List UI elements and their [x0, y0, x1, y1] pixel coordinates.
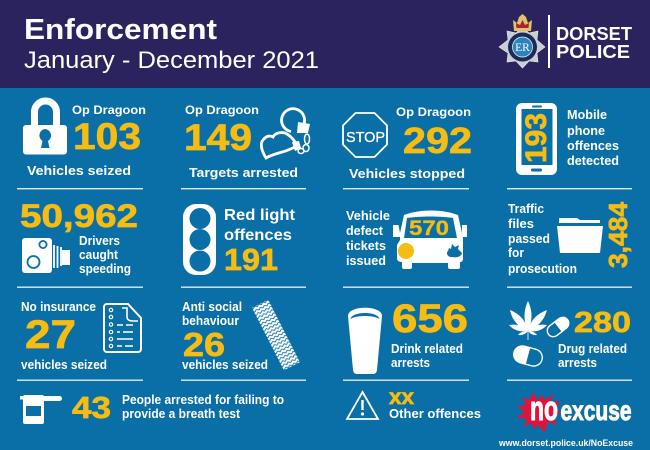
logo wordmark: DORSET — [556, 24, 632, 44]
panel: anti social behaviour: vehicles seized — [182, 358, 268, 372]
panel: vehicles seized, Op Dragoon: 103 — [73, 116, 141, 157]
label: offences — [567, 139, 619, 153]
panel: targets arrested, Op Dragoon: 149 — [184, 117, 252, 158]
label: issued — [346, 254, 386, 268]
panel: other offences: Other offences — [389, 406, 481, 421]
subtitle: date range: January - December 2021 — [24, 47, 319, 74]
header band — [0, 0, 650, 88]
icon: handcuffs — [261, 109, 310, 158]
panel: breath test arrests: People arrested for failing to — [122, 393, 284, 407]
panel: targets arrested, Op Dragoon — [184, 103, 310, 180]
panel: vehicle defect tickets — [346, 209, 467, 269]
panel: targets arrested, Op Dragoon: Op Dragoon — [185, 103, 259, 117]
icon: folder — [557, 218, 603, 253]
panel: drivers caught speeding: speeding — [79, 262, 131, 276]
panel: no insurance: No insurance — [21, 300, 96, 314]
panel: drug related arrests — [509, 301, 631, 370]
panel: red light offences — [183, 204, 296, 277]
panel: vehicles seized, Op Dragoon — [23, 101, 146, 178]
icon: traffic light — [183, 204, 216, 275]
label: Mobile — [567, 108, 607, 122]
panel: drivers caught speeding: caught — [79, 248, 119, 262]
icon: stop sign: STOP — [346, 129, 385, 146]
panel: drivers caught speeding: Drivers — [79, 234, 120, 248]
red splat — [517, 392, 561, 433]
panel: targets arrested, Op Dragoon: Targets arrested — [189, 165, 298, 180]
icon: capsule — [512, 344, 544, 368]
panel: other offences: xx — [389, 386, 414, 409]
icon: car with number: 570 — [409, 217, 449, 240]
label: Vehicle — [346, 209, 390, 223]
icon: warning triangle — [347, 392, 378, 419]
icon: document checklist — [104, 304, 141, 352]
panel: red light offences: offences — [224, 227, 292, 244]
panel: breath test arrests — [20, 390, 284, 425]
panel: other offences — [347, 386, 481, 421]
panel: drink related arrests — [348, 297, 468, 374]
panel: anti social behaviour: Anti social — [182, 300, 242, 314]
label — [346, 209, 390, 268]
title: Enforcement — [24, 14, 217, 46]
label: Traffic — [508, 202, 544, 216]
logo: Dorset Police — [499, 14, 632, 68]
panel: anti social behaviour — [182, 300, 300, 372]
website URL: www.dorset.police.uk/NoExcuse — [498, 438, 633, 449]
dividers — [17, 188, 632, 381]
label: phone — [567, 124, 605, 138]
panel: red light offences: Red light — [224, 207, 296, 224]
label — [567, 108, 619, 168]
label: tickets — [346, 239, 386, 253]
icon: diagonal capsule — [545, 315, 571, 339]
panel: red light offences: 191 — [224, 242, 278, 277]
panel: vehicles seized, Op Dragoon: Op Dragoon — [72, 103, 146, 117]
panel: drink related arrests: 656 — [392, 297, 468, 341]
label: prosecution — [508, 262, 577, 276]
icon: phone with number: 193 — [520, 113, 553, 163]
label: defect — [346, 224, 384, 238]
panel: vehicles stopped, Op Dragoon — [343, 105, 472, 181]
panel: vehicles stopped, Op Dragoon: Op Dragoon — [396, 105, 471, 119]
label — [508, 202, 577, 276]
panel: drug related arrests: arrests — [558, 356, 597, 370]
panel: no insurance: 27 — [25, 313, 76, 357]
label: files — [508, 217, 534, 231]
panel: drink related arrests: Drink related — [391, 342, 463, 356]
logo wordmark: POLICE — [556, 42, 630, 62]
icon: breathalyser — [20, 395, 62, 424]
label: passed — [508, 232, 550, 246]
panel: anti social behaviour: behaviour — [182, 314, 239, 328]
panel: mobile phone offences — [516, 103, 619, 175]
panel: anti social behaviour: 26 — [183, 326, 225, 363]
panel: no insurance: vehicles seized — [21, 358, 107, 372]
icon: tyre track — [252, 300, 300, 370]
panel: breath test arrests: provide a breath test — [122, 407, 241, 421]
panel: vehicles stopped, Op Dragoon: Vehicles stopped — [349, 166, 465, 181]
panel: drivers caught speeding — [20, 198, 138, 276]
panel: drivers caught speeding: 50,962 — [20, 198, 138, 234]
panel: no insurance — [21, 300, 141, 372]
panel: drug related arrests: 280 — [574, 307, 631, 339]
panel: drug related arrests: Drug related — [558, 342, 627, 356]
panel: vehicles stopped, Op Dragoon: 292 — [403, 120, 472, 161]
icon: cannabis leaf — [509, 301, 547, 340]
panel: traffic files — [508, 201, 633, 276]
panel: breath test arrests: 43 — [72, 390, 111, 425]
icon: pint glass — [348, 308, 382, 374]
logo wordmark — [556, 24, 632, 62]
panel: drink related arrests: arrests — [391, 356, 430, 370]
panel: vehicles seized, Op Dragoon: Vehicles seized — [27, 163, 131, 178]
icon: padlock — [23, 101, 67, 154]
label: for — [508, 246, 524, 260]
icon: police star badge: ER — [515, 42, 530, 54]
icon: speed camera — [22, 238, 70, 273]
panel: traffic files: 3,484 — [603, 201, 633, 268]
label: detected — [567, 154, 619, 168]
logo: No Excuse — [517, 390, 632, 433]
logo: No Excuse: no — [530, 390, 558, 428]
